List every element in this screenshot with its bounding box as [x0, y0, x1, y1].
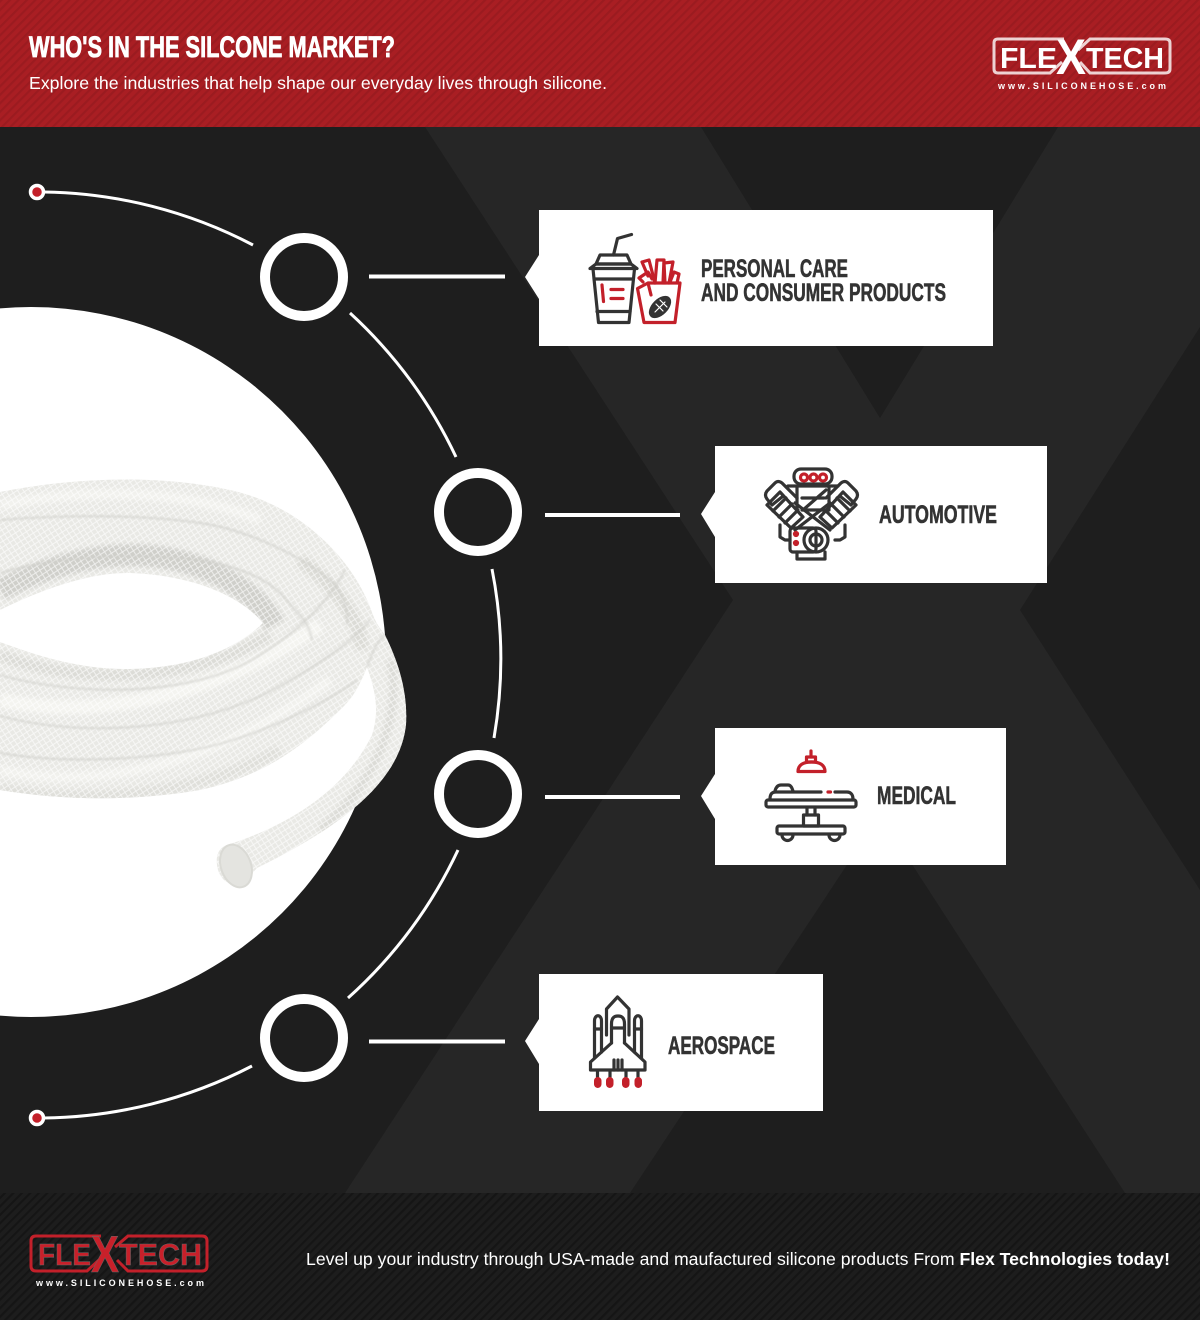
tube end	[214, 840, 258, 892]
title: WHO'S IN THE SILCONE MARKET?	[29, 31, 395, 64]
label: personal care	[701, 255, 946, 307]
logo: Flextech white: FLE	[1000, 43, 1057, 75]
label: automotive: AUTOMOTIVE	[879, 501, 997, 529]
footer band	[0, 1193, 1200, 1320]
silicone hose coil photo	[0, 480, 406, 888]
node ring 1	[265, 238, 343, 316]
connector 2	[545, 513, 680, 517]
connector 3	[545, 795, 680, 799]
logo: Flextech white: TECH	[1086, 43, 1164, 75]
call to action: Level up your industry through USA-made and maufactured silicone products From Flex Technologies today!	[306, 1249, 1170, 1269]
logo: Flextech red: FLE	[38, 1237, 91, 1272]
node ring 4	[265, 999, 343, 1077]
node ring 3	[439, 755, 517, 833]
icon: engine	[766, 469, 858, 559]
logo: Flextech red	[31, 1226, 207, 1288]
label: aerospace: AEROSPACE	[668, 1032, 775, 1060]
panel: medical	[701, 728, 1006, 865]
icon: operating table	[766, 751, 856, 841]
timeline start dot	[30, 186, 44, 198]
timeline arc	[44, 192, 501, 1118]
connector 4	[369, 1040, 505, 1044]
timeline end dot	[30, 1112, 44, 1124]
panel: personal care	[525, 210, 993, 346]
logo: Flextech white: www.SILICONEHOSE.com	[997, 81, 1166, 91]
icon: drink and fries	[590, 234, 680, 322]
header band	[0, 0, 1200, 127]
label: medical: MEDICAL	[877, 782, 956, 810]
logo: Flextech red: www.SILICONEHOSE.com	[35, 1278, 204, 1288]
white product circle	[0, 307, 386, 1017]
connector 1	[369, 274, 505, 278]
logo: Flextech red: TECH	[119, 1237, 202, 1272]
icon: space shuttle	[590, 997, 645, 1088]
logo: Flextech white	[994, 29, 1170, 91]
panel: aerospace	[525, 974, 823, 1111]
logo: Flextech white: X	[1056, 29, 1086, 85]
node ring 2	[439, 473, 517, 551]
subtitle: Explore the industries that help shape our everyday lives through silicone.	[29, 73, 607, 93]
panel: automotive	[701, 446, 1047, 583]
logo: Flextech red: X	[91, 1226, 119, 1284]
label: personal care: PERSONAL CARE	[701, 255, 848, 283]
label: personal care: AND CONSUMER PRODUCTS	[701, 279, 946, 307]
